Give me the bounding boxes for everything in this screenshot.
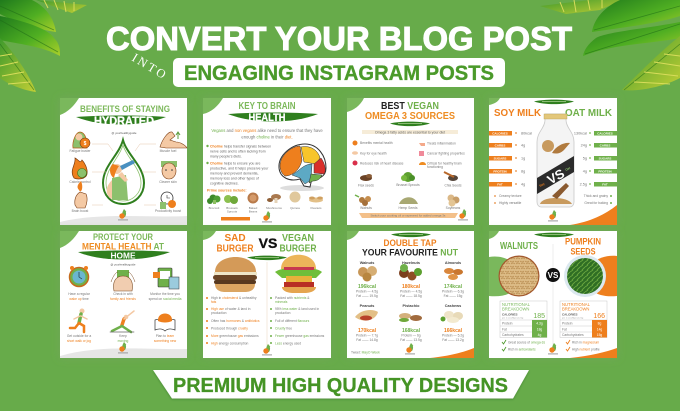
comparison rows: soy: 4g <box>521 144 525 148</box>
logo <box>548 343 558 354</box>
heading: pumpkin seeds: PUMPKIN <box>565 236 601 248</box>
text: learn something: Plan to learn <box>156 334 174 338</box>
table: pumpkin nutrition: 166 <box>593 313 605 320</box>
food: brussels sprouts: Sprouts <box>227 210 238 214</box>
checks: pumpkin: High nutrient profile <box>572 348 600 352</box>
notes: soy: Creamy texture <box>499 194 522 198</box>
panel: soy milk vs oat milk <box>489 98 617 225</box>
subtitle connector: into: INTO <box>129 51 168 82</box>
table: pumpkin nutrition: Protein <box>562 322 573 326</box>
nut: walnuts <box>356 261 378 298</box>
food: brussel sprouts: Brussel Sprouts <box>396 183 420 187</box>
table: pumpkin nutrition: NUTRITIONAL <box>562 302 591 307</box>
illustration: sad burger <box>213 257 257 292</box>
icon: water drop with person <box>103 140 144 204</box>
text: learn something: something new <box>154 339 177 343</box>
text: learn something <box>154 334 177 343</box>
food: brussels sprouts: Brussels <box>226 206 238 210</box>
logo <box>458 209 468 220</box>
bottle: Oat <box>564 166 571 172</box>
benefits list right: Critical for healthy brain <box>427 162 462 166</box>
list: vegan burger: Fewer greenhouse gas emissions <box>275 334 325 338</box>
notes: oat <box>584 194 612 205</box>
byline: @ yourhealthyguide <box>111 262 136 266</box>
table: pumpkin nutrition: 8g <box>598 322 601 326</box>
corner: orange <box>430 348 474 358</box>
list: vegan burger: minerals <box>275 300 288 304</box>
heading band: health: HEALTH <box>248 112 286 124</box>
heading: pumpkin seeds <box>565 236 601 258</box>
benefits list left: Reduces risk of heart disease <box>360 162 404 166</box>
heading: double tap: DOUBLE TAP <box>384 238 436 248</box>
comparison rows: soy: CALORIES <box>492 132 508 136</box>
comparison rows: soy: SUGARS <box>494 156 506 160</box>
corner: orange <box>570 205 617 225</box>
heading: sad burger: BURGER <box>216 244 254 254</box>
bottle: VS <box>544 166 567 187</box>
nut: pistachio: Fat —— 13.5g <box>400 338 422 342</box>
food: broccoli: Broccoli <box>209 206 220 210</box>
icon: fatigue buster: $ <box>84 141 87 147</box>
illustration: brain <box>279 144 326 191</box>
text: keep moving: Keep <box>119 334 127 338</box>
bullets: choline <box>206 144 271 186</box>
heading: soy milk: SOY MILK <box>494 108 542 119</box>
table: walnuts nutrition: 185 <box>533 313 545 320</box>
table: pumpkin nutrition: CALORIES <box>562 312 578 316</box>
comparison rows: soy: PROTEIN <box>493 170 507 174</box>
comparison rows: oat: 24g <box>581 144 587 148</box>
nut: peanuts: 170kcal <box>358 328 377 334</box>
bottle <box>537 114 574 207</box>
icon: social media screens <box>153 268 179 289</box>
table: walnuts nutrition: 4.3g <box>536 322 543 326</box>
benefits list right <box>419 142 465 169</box>
heading: sad burger: SAD <box>224 233 246 244</box>
food: hemp seeds: Hemp Seeds <box>398 206 418 210</box>
list: vegan burger: Cruelty free <box>275 326 292 330</box>
benefits list left <box>352 140 404 166</box>
table: walnuts nutrition: NUTRITIONAL <box>502 302 531 307</box>
list: vegan burger: 95% less water & land used in <box>275 307 319 311</box>
table: pumpkin nutrition: 15g <box>597 333 602 337</box>
table: walnuts nutrition: Fat <box>502 328 507 332</box>
heading band: home: HOME <box>110 252 136 260</box>
top mark <box>391 233 431 237</box>
intro text <box>211 128 323 140</box>
comparison rows: soy: 4g <box>521 182 525 186</box>
heading band: hydrated: HYDRATED <box>94 116 154 128</box>
table: pumpkin nutrition: per 1 oz (28g) serving <box>562 316 584 320</box>
table: pumpkin nutrition <box>560 301 607 338</box>
decorative leaves: top left <box>0 0 87 92</box>
heading: benefits: BENEFITS OF STAYING <box>80 103 170 114</box>
heading: protect your: PROTECT YOUR <box>93 232 153 242</box>
checks: walnuts: Great source of omega-3s <box>508 340 545 344</box>
food: mushrooms: Mushrooms <box>266 206 282 210</box>
list: sad burger: fats <box>211 300 217 304</box>
food: chia seeds: Chia Seeds <box>444 184 462 188</box>
icon: calorie control <box>72 158 87 179</box>
text: wake up time: wake up time <box>69 297 89 301</box>
table: pumpkin nutrition: BREAKDOWN <box>562 306 589 312</box>
corner: orange <box>570 348 617 358</box>
nut: almonds: Protein — 6.3g <box>442 290 464 294</box>
benefits list right: functioning <box>427 165 443 169</box>
comparison rows: oat: PROTEIN <box>598 170 612 174</box>
text: wake up time: Have a regular <box>68 292 91 296</box>
nut: peanuts: Fat —— 14.8g <box>356 338 378 342</box>
logo <box>262 344 272 355</box>
table: walnuts nutrition: 18g <box>537 328 542 332</box>
arrows from drop to icons <box>92 144 156 205</box>
table: walnuts nutrition: Protein <box>502 322 513 326</box>
icon: book with brain <box>155 314 175 331</box>
label: productivity boost: Productivity boost <box>155 209 181 213</box>
panel: walnuts vs pumpkin seeds <box>489 231 617 358</box>
table: walnuts nutrition: CALORIES <box>502 312 518 316</box>
table: pumpkin nutrition: Fat <box>562 328 567 332</box>
food: quinoa: Quinoa <box>290 206 300 210</box>
comparison rows: oat: 2.5g <box>580 182 587 186</box>
list: sad burger: Often has hormones & antibiotics <box>211 319 260 323</box>
nut: hazelnuts: Fat —— 18.5g <box>400 294 422 298</box>
text: check in: family and friends <box>110 297 136 301</box>
comparison rows: oat: FAT <box>602 182 608 186</box>
panel: double tap your favourite nut <box>347 231 474 358</box>
comparison rows: oat: CARBS <box>600 144 610 148</box>
heading: oat milk: OAT MILK <box>565 108 613 119</box>
logo <box>548 210 558 221</box>
heading: vegan burger <box>280 233 317 254</box>
checks: pumpkin <box>566 340 600 352</box>
center divider <box>552 244 554 350</box>
notes: oat: Great for baking <box>584 201 608 205</box>
bowl: pumpkin seeds <box>564 255 606 297</box>
table: pumpkin nutrition: Carbohydrates <box>562 333 584 337</box>
footer ribbon: PREMIUM HIGH QUALITY DESIGNS <box>173 374 508 397</box>
list: sad burger: More greenhouse gas emissions <box>211 334 259 338</box>
nut: almonds: 174kcal <box>444 284 463 290</box>
table: walnuts nutrition: Carbohydrates <box>502 333 524 337</box>
nut: cashews <box>440 304 464 342</box>
food: baked beans: Beans <box>249 210 258 214</box>
heading: vegan burger: VEGAN <box>282 233 314 244</box>
icon: productivity boost <box>160 192 176 209</box>
comparison rows: oat: 5g <box>583 156 587 160</box>
nut: cashews: Protein — 5.2g <box>442 334 464 338</box>
comparison rows: soy: CARBS <box>495 144 505 148</box>
list: vegan burger: production <box>275 311 291 315</box>
comparison rows: oat: 4g <box>583 170 587 174</box>
bullets: choline: many people's diets. <box>210 154 242 158</box>
panel: key to brain health <box>203 98 331 225</box>
bowl: walnuts <box>498 256 540 296</box>
panel: best vegan omega 3 sources <box>347 98 474 225</box>
nut: pistachio: Pistachio <box>403 304 420 308</box>
comparison rows: oat: 130kcal <box>574 132 587 136</box>
list: vegan burger: Full of different flavours <box>275 319 310 323</box>
notes: soy: Highly versatile <box>499 201 522 205</box>
source note: Tweet: MayO Week <box>351 350 380 354</box>
logo <box>262 211 272 222</box>
bullets: choline: Choline helps transfer signals between <box>210 144 271 148</box>
list: sad burger: High in cholesterol & unhealthy <box>211 296 257 300</box>
text: keep moving: moving <box>118 339 128 343</box>
label: brain boost: Brain boost <box>72 209 88 213</box>
nut: cashews: Cashews <box>445 304 461 308</box>
comparison rows: oat <box>574 131 617 186</box>
nut: almonds: Fat —— 15g <box>444 294 463 298</box>
bullets: choline: productive, and it helps preserve your <box>210 166 269 170</box>
nut: walnuts: 196kcal <box>358 284 377 290</box>
nut: pistachio: 168kcal <box>402 328 421 334</box>
table: walnuts nutrition: BREAKDOWN <box>502 306 529 312</box>
nut: hazelnuts: 180kcal <box>402 284 421 290</box>
heading: walnuts: WALNUTS <box>500 241 538 252</box>
bullets: choline: memory and prevent dementia, <box>210 172 258 176</box>
heading mark <box>390 122 430 126</box>
comparison rows: soy: 8g <box>521 170 525 174</box>
icon: brain boost <box>75 181 87 208</box>
button: source <box>221 217 250 220</box>
label: calorie control: Calorie control <box>69 180 91 184</box>
nut: pistachio <box>399 304 422 342</box>
top mark <box>534 100 574 104</box>
benefits list right: Treats inflammation <box>427 142 456 146</box>
nut: hazelnuts: Protein — 4.5g <box>400 290 422 294</box>
benefits list left: Benefits mental health <box>360 141 393 145</box>
food: brussels sprouts <box>224 195 238 214</box>
subtitle pill: ENGAGING INSTAGRAM POSTS <box>184 62 494 85</box>
heading mark <box>247 256 287 260</box>
illustration: vegan burger <box>275 255 322 293</box>
intro strip: Omega 3 fatty acids are essential to your diet <box>375 130 445 134</box>
label: fatigue buster: Fatigue buster <box>69 149 91 153</box>
title: CONVERT YOUR BLOG POST <box>106 20 572 57</box>
text: short walk: Get outside for a <box>67 334 91 338</box>
footer strip: Switch your cooking oil or rapeseed for added omega 3s <box>371 214 446 218</box>
list: sad burger: High use of water & land in <box>211 307 251 311</box>
list: sad burger <box>206 296 260 346</box>
nut: hazelnuts <box>399 261 422 298</box>
icon: alarm clock <box>70 266 88 286</box>
comparison rows: oat: SUGARS <box>599 156 611 160</box>
table: walnuts nutrition <box>500 301 547 338</box>
text: keep moving <box>118 334 128 343</box>
benefits list left: Key for eye health <box>360 152 387 156</box>
text: short walk: short walk or jog <box>67 339 91 343</box>
panel: benefits of staying hydrated <box>60 98 187 225</box>
bullets: choline: memory loss and other types of <box>210 176 259 180</box>
food: baked beans: Baked <box>249 206 258 210</box>
food: flax seeds: Flax seeds <box>358 184 374 188</box>
checks: pumpkin: Rich in magnesium <box>572 340 599 344</box>
food: soybeans: Soybeans <box>446 206 461 210</box>
list: sad burger: production <box>211 311 227 315</box>
intro text: Vegans and non vegans alike need to ensure that they have <box>211 128 323 133</box>
nut: almonds: Almonds <box>445 261 461 265</box>
center divider <box>266 262 268 347</box>
nut: almonds <box>442 261 464 298</box>
icon: runner <box>70 308 87 332</box>
logo <box>405 343 415 354</box>
bottle: Soy <box>538 181 546 188</box>
panel: protect your mental health at home <box>60 231 187 358</box>
bullets: choline: cognitive declines. <box>210 182 239 186</box>
badge: vs: VS <box>548 271 559 280</box>
icon: phone check-in <box>111 270 135 291</box>
text: monitor time: spend on social media <box>149 297 182 301</box>
comparison rows: soy <box>489 131 532 186</box>
green half circle <box>489 257 520 296</box>
notes: soy <box>494 194 522 205</box>
text: wake up time <box>68 292 91 301</box>
orange half circle <box>586 256 617 296</box>
list: vegan burger <box>270 296 325 346</box>
comparison rows: soy: 1g <box>521 156 525 160</box>
text: check in <box>110 292 136 301</box>
nut: peanuts: Protein — 7.7g <box>356 334 378 338</box>
icon: clearer skin <box>161 161 177 179</box>
byline: @ yourhealthyguide <box>112 131 137 135</box>
table: pumpkin nutrition: 14g <box>597 328 602 332</box>
list: vegan burger: Less energy used <box>275 342 301 346</box>
checks: walnuts: Rich in antioxidants <box>508 348 536 352</box>
text: short walk <box>67 334 91 343</box>
heading: mental health at: MENTAL HEALTH AT <box>82 242 164 252</box>
nut: walnuts: Walnuts <box>360 261 374 265</box>
heading: key to brain: KEY TO BRAIN <box>238 101 296 112</box>
icon: muscle fuel <box>160 132 187 148</box>
logo <box>118 209 128 220</box>
bullets: choline: Choline helps to ensure you are <box>210 162 260 166</box>
text: monitor time: Monitor the time you <box>150 292 180 296</box>
label: clearer skin: Clearer skin <box>159 180 177 184</box>
checks: walnuts <box>502 340 545 352</box>
text: check in: Check in with <box>113 292 133 296</box>
logo <box>118 342 128 353</box>
list: sad burger: High energy consumption <box>211 342 249 346</box>
food: baked beans <box>248 192 258 214</box>
nut: cashews: 166kcal <box>444 328 463 334</box>
table: walnuts nutrition: 4g <box>538 333 541 337</box>
nut: cashews: Fat —— 13.2g <box>442 338 464 342</box>
food: walnuts: Walnuts <box>360 206 372 210</box>
heading: pumpkin seeds: SEEDS <box>570 246 596 258</box>
heading: sad burger <box>216 233 254 254</box>
nut: walnuts: Protein — 4.5g <box>356 290 378 294</box>
food: peanuts: Peanuts <box>310 206 322 210</box>
nut: peanuts <box>355 304 378 342</box>
panel: sad burger vs vegan burger <box>203 231 331 358</box>
comparison rows: soy: FAT <box>497 182 503 186</box>
list: vegan burger: Packed with nutrients & <box>275 296 310 300</box>
intro text: enough choline in their diet. <box>241 134 293 140</box>
notes: oat: Thick and grainy <box>584 194 608 198</box>
icon: stretching figure <box>110 311 134 332</box>
text: monitor time <box>149 292 182 301</box>
sources heading: Prime sources include: <box>207 188 247 192</box>
table: walnuts nutrition: per 1 oz (28g) serving <box>502 316 524 320</box>
nut: peanuts: Peanuts <box>360 304 374 308</box>
nut: hazelnuts: Hazelnuts <box>402 261 420 265</box>
nut: walnuts: Fat —— 19.5g <box>356 294 378 298</box>
list: sad burger: Produced through cruelty <box>211 326 248 330</box>
heading: omega 3 sources: OMEGA 3 SOURCES <box>365 110 455 122</box>
label: muscle fuel: Muscle fuel <box>160 149 177 153</box>
comparison rows: soy: 80kcal <box>521 132 532 136</box>
heading: best vegan: BEST VEGAN <box>381 101 439 112</box>
decorative leaves: top right <box>540 0 680 90</box>
heading: vs: VS <box>259 235 277 251</box>
top mark <box>534 233 574 237</box>
heading: your favourite nut: YOUR FAVOURITE NUT <box>362 248 458 258</box>
bullets: choline: nerve cells and is often lacking from <box>210 150 266 154</box>
benefits list right: Cancer fighting properties <box>427 152 465 156</box>
heading: vegan burger: BURGER <box>280 244 317 254</box>
nut: pistachio: Protein — 6g <box>401 334 421 338</box>
comparison rows: oat: CALORIES <box>597 132 613 136</box>
